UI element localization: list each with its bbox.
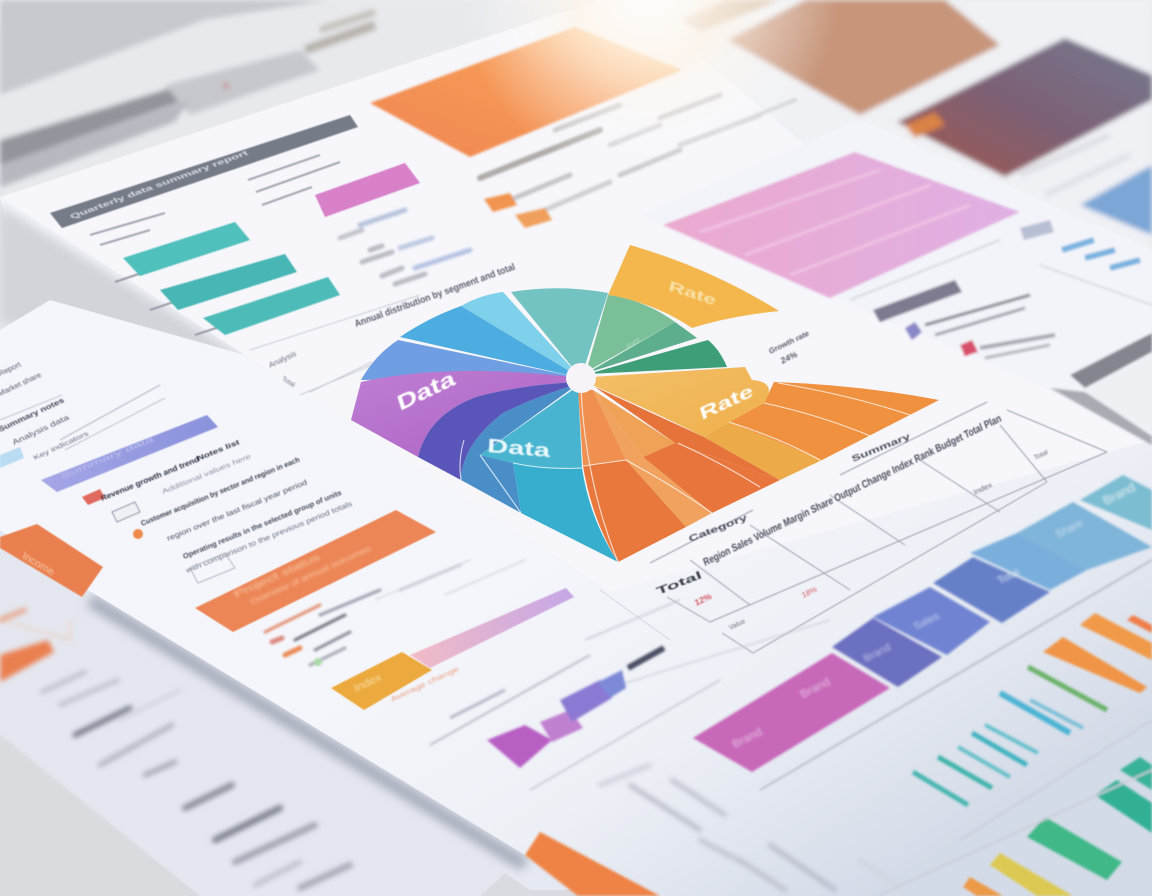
text block: dark paragraph	[82, 438, 353, 583]
panel: orange bar: Project status	[232, 552, 322, 601]
panel: purple bar	[41, 415, 218, 492]
panel: orange footer tab	[525, 832, 660, 896]
desk corner bottom left	[0, 735, 195, 896]
wedge: orange upper lobe	[578, 388, 626, 466]
wedge: mid blue	[461, 384, 578, 513]
pie label: purple: Data	[395, 366, 458, 416]
chart: teal bars	[123, 222, 340, 335]
text block: pie caption: Annual distribution by segment and total	[353, 262, 517, 330]
grey label	[873, 280, 962, 322]
table cell values: 12%	[693, 591, 713, 608]
wedge: teal blue	[480, 386, 582, 468]
heading: dark header bar	[50, 115, 358, 228]
pie label: cyan: Data	[487, 435, 552, 461]
pie label: flap: Rate	[697, 380, 755, 424]
fold line	[600, 590, 670, 640]
panel: top text lines	[480, 95, 795, 228]
table third header: Category	[687, 512, 749, 544]
table: Total	[1033, 449, 1049, 462]
text block: mid lines	[265, 560, 525, 666]
wedge: top yellow flap	[592, 367, 769, 437]
pie label: green: Rate	[625, 334, 642, 352]
glow: light haze top	[440, 0, 860, 180]
center hub	[566, 363, 596, 393]
text block: upper left small lines	[90, 155, 340, 335]
panel: orange bar	[195, 510, 436, 632]
panel: orange left tab: Income	[21, 550, 55, 579]
background sheets top right	[600, 0, 1152, 440]
chart: bottom stepped blocks: Sales	[911, 610, 942, 632]
wedge: indigo	[418, 382, 578, 480]
chart: yellow and pink gradient bar	[331, 588, 574, 710]
chart: bottom stepped blocks: Brand	[861, 642, 893, 664]
wedge: cyan	[513, 463, 618, 562]
table: Value	[728, 618, 746, 632]
right sheet area	[640, 120, 1152, 445]
chart: bottom stepped blocks: Brand	[730, 726, 765, 750]
blue mini bars	[1062, 240, 1094, 250]
text block: left upper small: Key indicators	[32, 430, 91, 462]
chart: yellow and pink gradient bar: Index	[352, 672, 384, 695]
background sheets top left	[0, 0, 600, 200]
wedge: green	[586, 295, 675, 372]
table: 18%	[801, 585, 818, 600]
chart: bottom stepped blocks	[570, 475, 1152, 790]
heading: dark header bar: Quarterly data summary report	[68, 148, 250, 221]
wedge: purple	[351, 371, 581, 457]
wedge: orange lower	[583, 460, 686, 562]
pink panel	[663, 152, 1020, 298]
text block: dark paragraph: Operating results in the selected group of units	[182, 488, 343, 561]
left and lower sheet body	[0, 300, 1152, 896]
sheet shadow	[90, 600, 525, 865]
grey banner	[1070, 333, 1152, 388]
table header row: Total	[655, 569, 704, 598]
wedge: deep strip	[595, 387, 780, 480]
chart: yellow and pink gradient bar: Average change	[389, 665, 460, 704]
text block: dark paragraph: Customer acquisition by sector and region in each	[140, 455, 301, 528]
wedge: deep orange	[643, 443, 780, 513]
wedge: yellow exploded	[608, 245, 779, 328]
text block: pie caption: Total	[281, 375, 296, 390]
blue panel	[1080, 165, 1152, 235]
panel: orange bar: Overview of annual outcomes	[249, 544, 372, 607]
wedge: teal	[511, 288, 608, 378]
table	[650, 402, 1107, 653]
wedge: periwinkle	[361, 340, 581, 380]
icon: orange chips	[484, 193, 517, 212]
pie label: yellow: Rate	[667, 277, 718, 309]
panel: orange left tab	[0, 524, 103, 597]
lower-left sheet	[0, 530, 525, 896]
chart: bottom stepped blocks: Total	[995, 566, 1022, 586]
wedge: yellow	[704, 422, 822, 480]
text block: pie caption	[250, 262, 517, 395]
chart: bottom right bars	[880, 613, 1152, 896]
chart: small purple bars	[430, 600, 720, 790]
panel: bottom left lower sheet content	[0, 610, 350, 888]
wedge: light strip	[593, 390, 712, 527]
small panel top	[680, 0, 780, 32]
chart: pie chart	[351, 245, 939, 562]
dark purple panel	[897, 38, 1152, 177]
text block: left upper small	[0, 360, 165, 468]
chart: bottom stepped blocks: Share	[1053, 518, 1085, 540]
text block: dark paragraph: Notes list	[196, 438, 241, 463]
panel: orange header	[370, 27, 682, 157]
wedge: light blue	[461, 292, 581, 378]
wedge: right orange	[729, 382, 939, 460]
text block: dark paragraph: with comparison to the previous period totals	[184, 499, 353, 575]
slice dividers	[460, 383, 910, 562]
top sheet over the fold	[0, 0, 1152, 592]
chart: pink bar	[315, 163, 420, 217]
left gap shadow	[0, 205, 610, 600]
text block: dark paragraph: region over the last fiscal year period	[166, 478, 308, 543]
brown panel	[727, 0, 1000, 115]
callout: right of pie: 24%	[780, 349, 799, 366]
callout: right of pie: Growth rate	[768, 328, 811, 356]
text block: bottom center lines	[600, 765, 900, 890]
text block: dark paragraph: Revenue growth and trend	[99, 454, 200, 503]
chart: bottom stepped blocks: Brand	[798, 676, 833, 700]
text block: dark paragraph: Additional values here	[161, 452, 252, 496]
chart: bottom stepped blocks: Brand	[1100, 481, 1138, 507]
chart: grey blue bars	[340, 210, 470, 284]
wedge: mid orange	[593, 390, 675, 457]
table: Index	[973, 480, 993, 497]
text block: left upper small: Analysis data	[10, 413, 72, 447]
text block: pie caption: Analysis	[267, 349, 298, 370]
panel: purple bar: Summary data	[59, 435, 155, 481]
table second header: Region Sales Volume Margin Share Output Change Index Rank Budget Total Plan	[702, 413, 1003, 569]
wedge: blue	[400, 306, 581, 378]
table fourth header: Summary	[850, 431, 911, 464]
